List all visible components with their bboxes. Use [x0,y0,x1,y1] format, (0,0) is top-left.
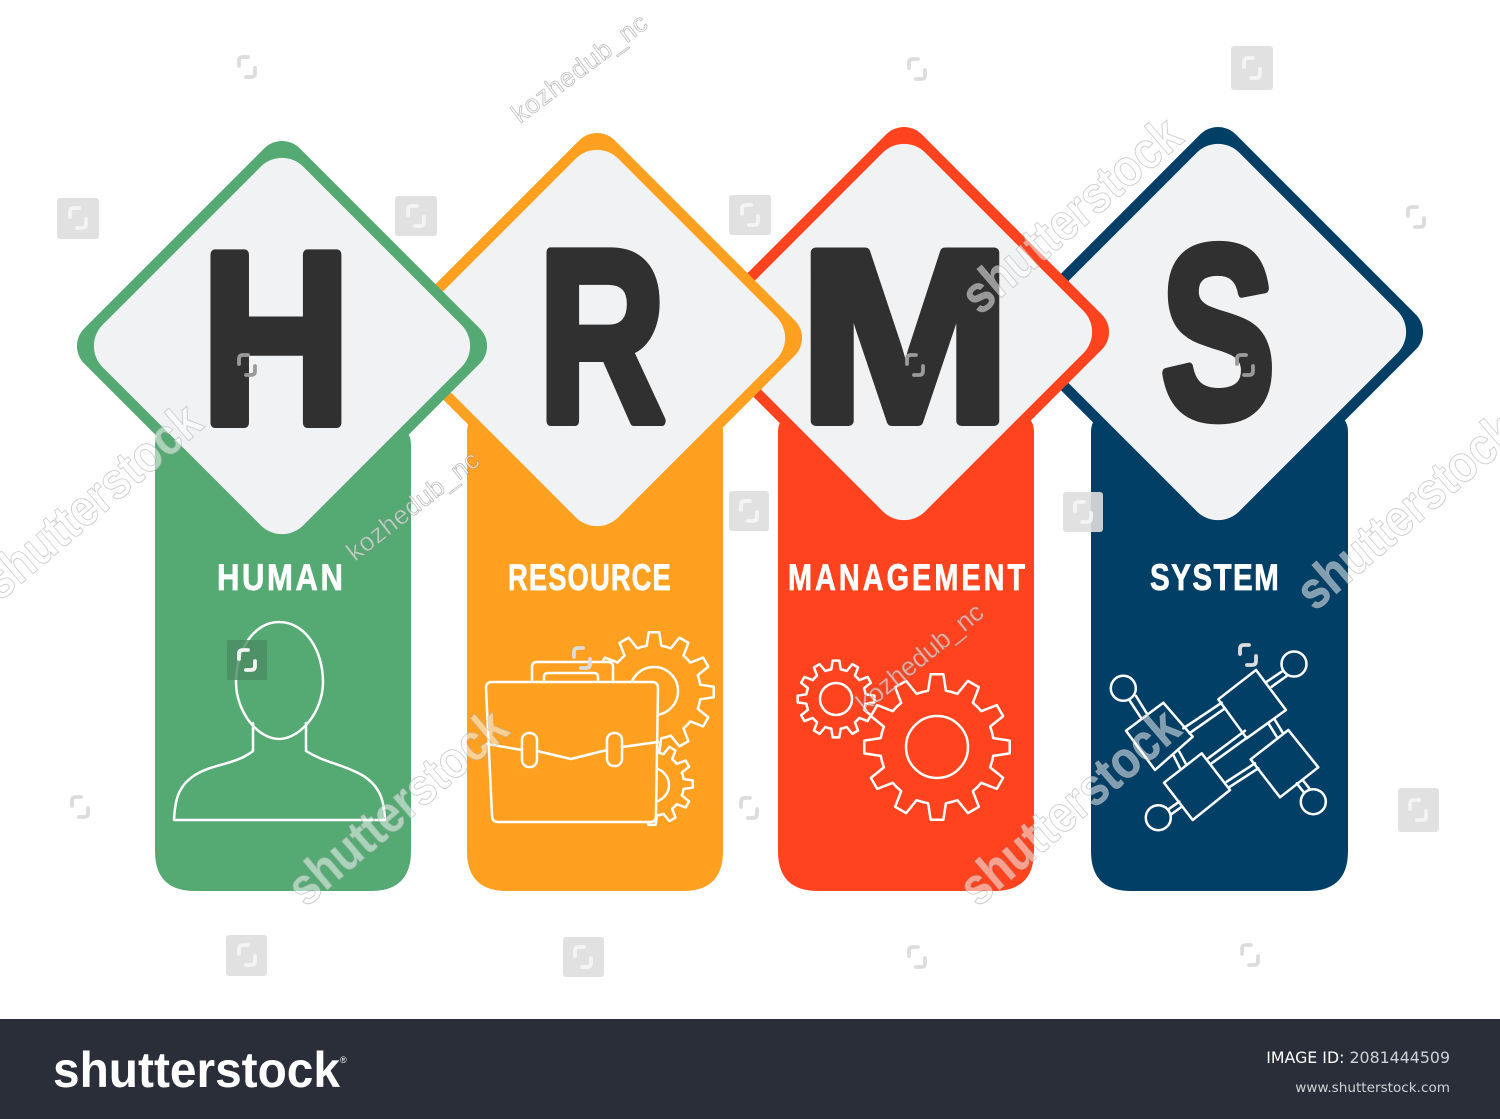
letter M: M [799,199,1011,473]
diamond: letter M [689,117,1119,547]
footer logo: shutterstock [53,1042,340,1098]
label: system: SYSTEM [1150,558,1279,599]
footer bar [0,1019,1500,1119]
footer url: www.shutterstock.com [1295,1080,1450,1096]
watermark: shutterstock: shutterstock [950,106,1193,325]
resource column [467,415,723,891]
watermark: shutterstock: shutterstock [276,698,519,917]
diamond: letter S [1003,117,1433,547]
icon: system blocks [1111,652,1326,830]
panel: resource [382,123,812,891]
icon: gears [798,661,1010,820]
icon: person [174,622,385,820]
footer image id: IMAGE ID: 2081444509 [1266,1048,1450,1067]
label: human: HUMAN [217,558,343,599]
panel: management [689,117,1119,891]
letter S: S [1161,196,1275,469]
panel: system [1003,117,1433,891]
label: resource: RESOURCE [508,557,671,598]
letter R: R [538,201,666,474]
watermark: contributor name: kozhedub_nc [850,597,989,718]
watermark: tile marks [57,46,1439,977]
watermark: shutterstock [0,106,1500,917]
watermark: contributor name [340,7,989,718]
system column [1091,415,1348,891]
watermark: contributor name: kozhedub_nc [506,7,653,129]
footer registered mark: ® [340,1055,347,1065]
human column [155,428,411,891]
watermark: contributor name: kozhedub_nc [340,445,485,567]
diamond: letter H [67,131,497,561]
management column [778,415,1034,891]
watermark: shutterstock: shutterstock [948,698,1191,917]
letter H: H [201,202,351,476]
icon: briefcase with gears [486,632,714,825]
diamond: letter R [382,123,812,553]
label: management: MANAGEMENT [788,558,1025,599]
panel: human [67,131,497,891]
